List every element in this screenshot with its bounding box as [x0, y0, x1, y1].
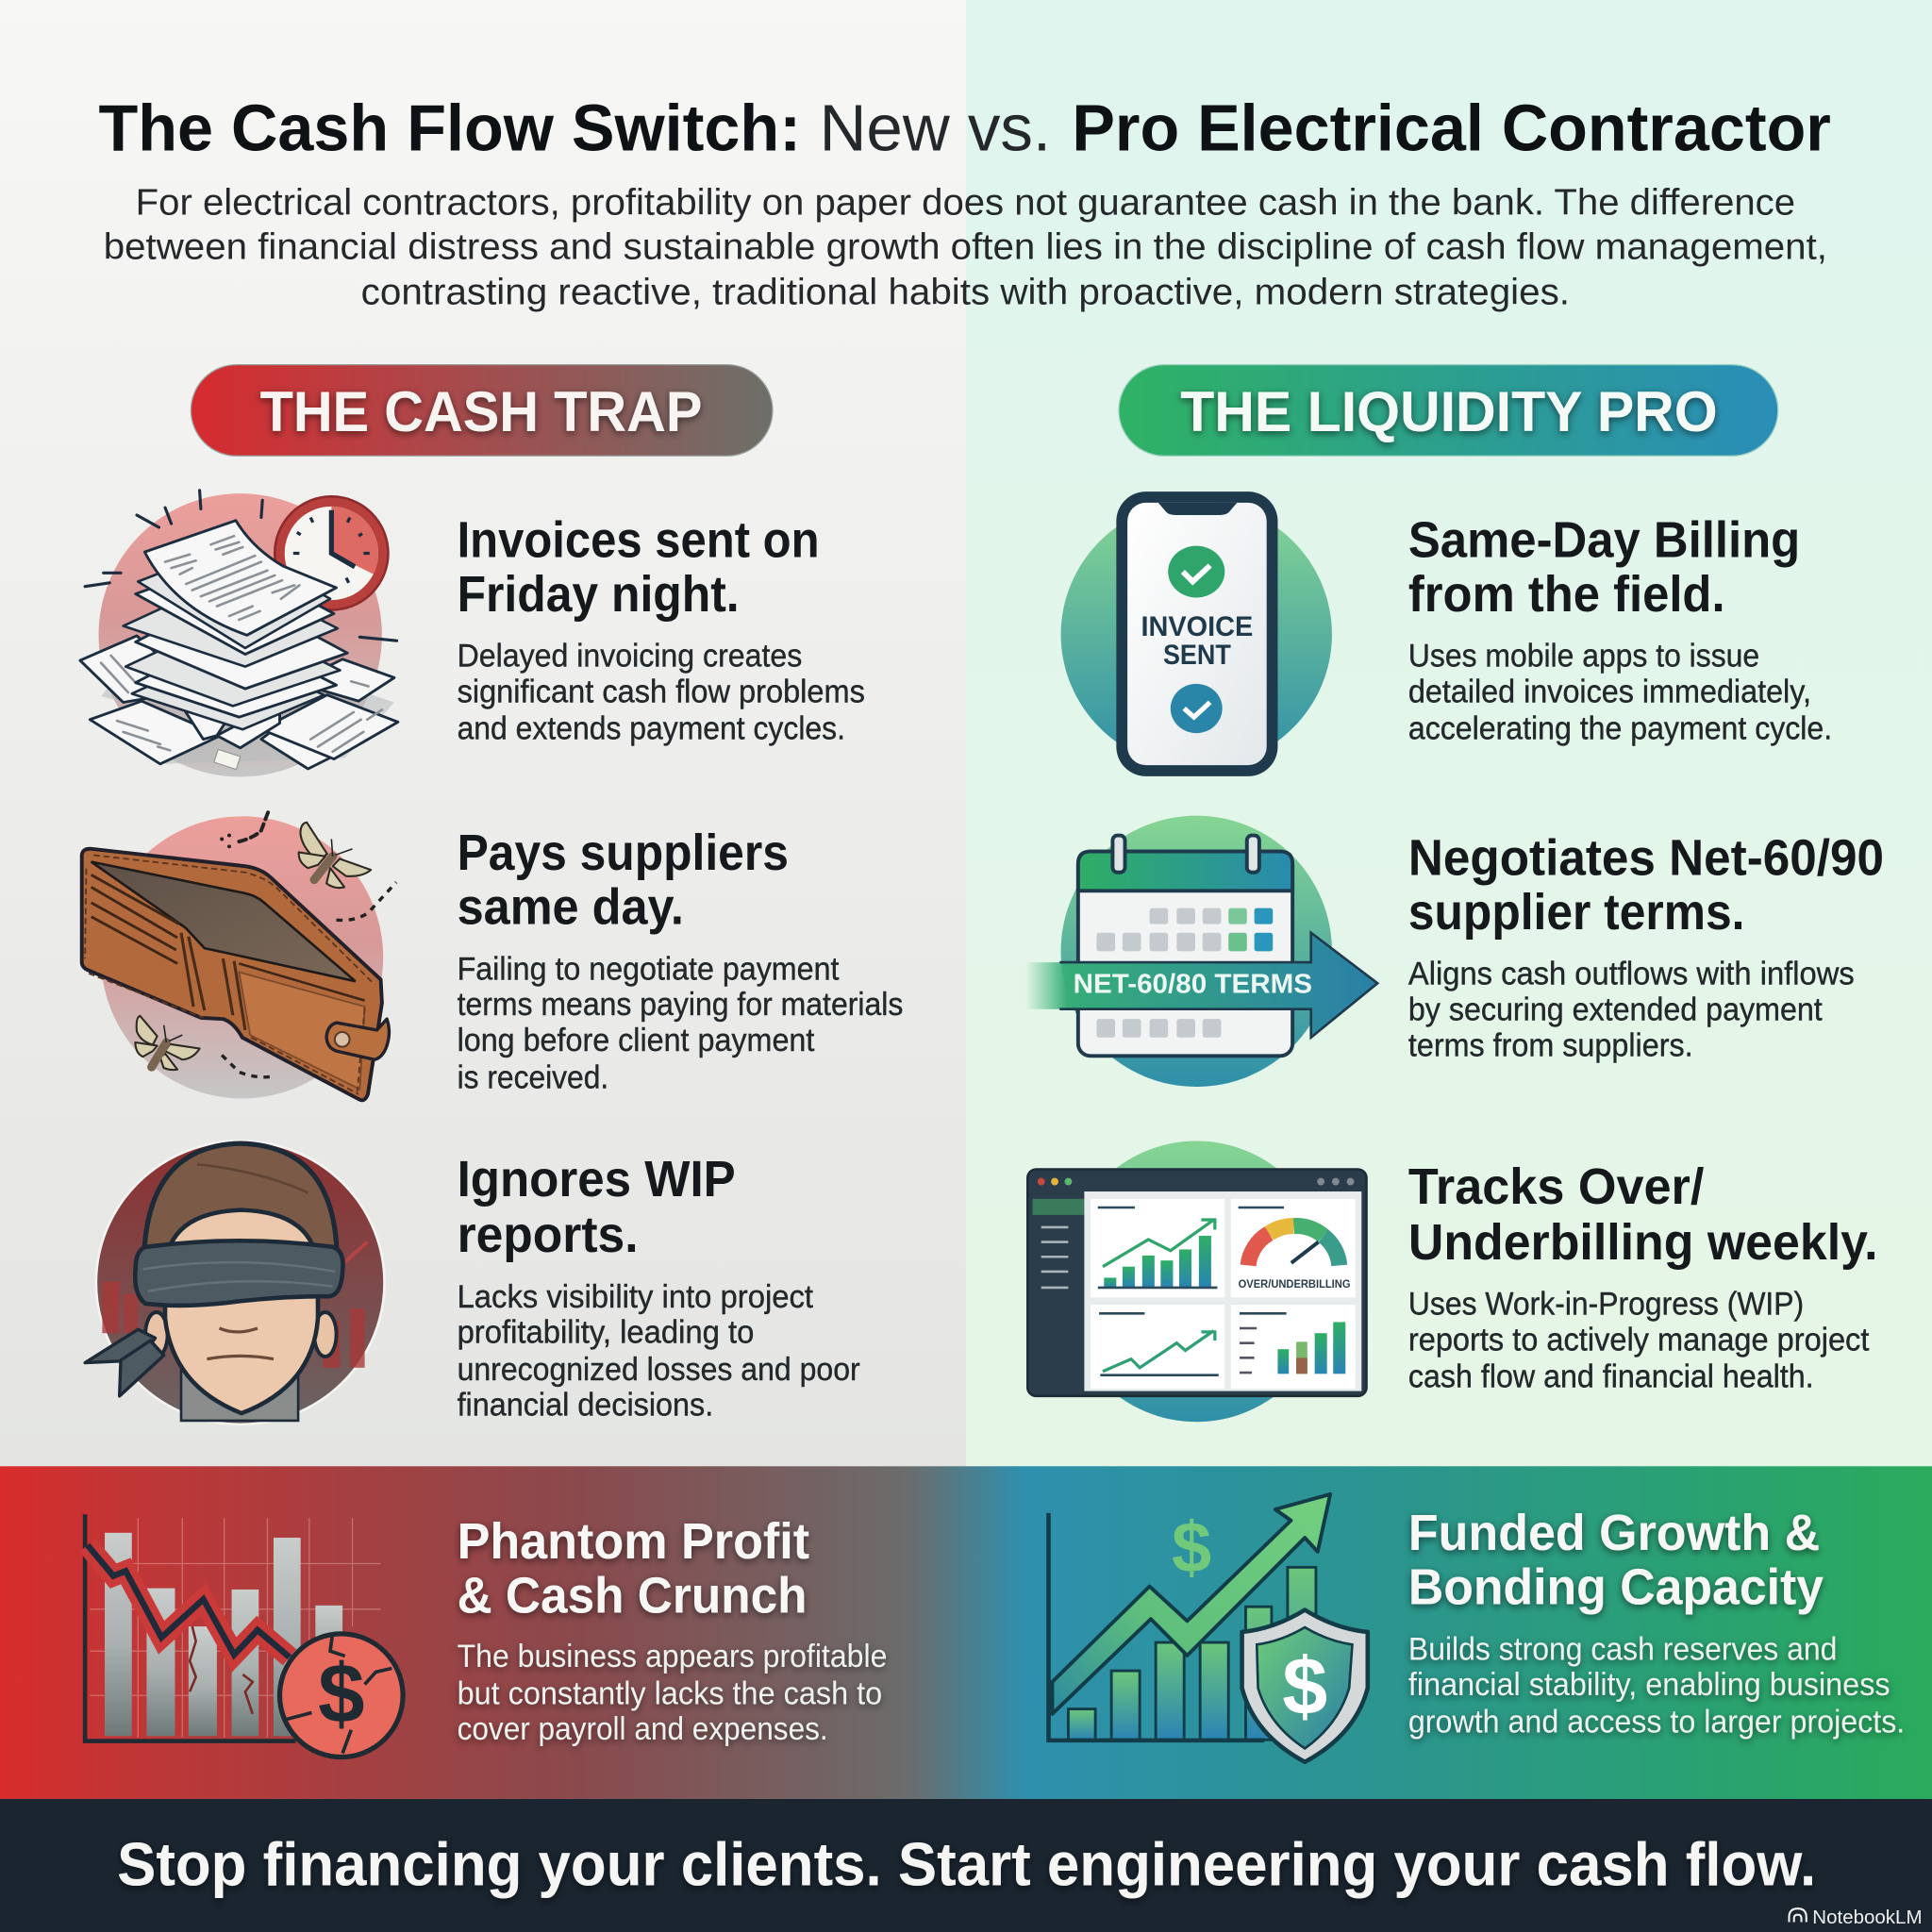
text: pays suppliers same day: Pays suppliers: [458, 825, 789, 881]
text: same-day billing: [1408, 512, 1832, 747]
icon: paper stack with clock: [80, 491, 398, 777]
text: tracks over underbilling: [1408, 1159, 1878, 1395]
text: invoices sent on friday night: Invoices sent on: [458, 512, 820, 568]
text: funded growth: Builds strong cash reserves and: [1408, 1631, 1837, 1667]
text: same-day billing: Uses mobile apps to issue: [1408, 639, 1759, 675]
text: negotiates supplier terms: by securing extended payment: [1408, 991, 1823, 1027]
icon: blindfolded man: [85, 1141, 385, 1424]
chart: bars and trend: [1098, 1220, 1217, 1288]
text: ignores wip reports: Ignores WIP: [458, 1152, 736, 1208]
chart: gauge: OVER/UNDERBILLING: [1239, 1278, 1351, 1291]
text: negotiates supplier terms: Aligns cash outflows with inflows: [1408, 957, 1855, 992]
text: same-day billing: accelerating the payment cycle.: [1408, 711, 1832, 747]
text: phantom profit: cover payroll and expenses.: [458, 1711, 828, 1747]
icon: cracked dollar coin: $: [318, 1647, 364, 1740]
title: [98, 91, 1831, 164]
panel: outcome band: [0, 1466, 1932, 1799]
text: same-day billing: detailed invoices immediately,: [1408, 674, 1811, 709]
text: tracks over underbilling: cash flow and financial health.: [1408, 1359, 1814, 1395]
icon part: moth: [299, 823, 371, 888]
text: same-day billing: from the field.: [1408, 567, 1725, 623]
chart: stacked bars: [1240, 1322, 1345, 1374]
text: pays suppliers same day: same day.: [458, 880, 684, 936]
chart: line: [1103, 1331, 1215, 1372]
text: negotiates supplier terms: terms from suppliers.: [1408, 1027, 1693, 1063]
heading: the cash trap pill: THE CASH TRAP: [260, 380, 702, 443]
intro text: [104, 182, 1827, 313]
text: negotiates supplier terms: supplier terms.: [1408, 885, 1744, 941]
text: pays suppliers same day: long before client payment: [458, 1023, 815, 1058]
icon part: blue check: [1171, 684, 1223, 733]
text: phantom profit: Phantom Profit: [458, 1514, 809, 1570]
chart: rising growth with shield: [1049, 1494, 1368, 1762]
panel: footer bar: [0, 1799, 1932, 1932]
heading: the cash trap pill: [191, 365, 773, 456]
text: negotiates supplier terms: [1408, 830, 1884, 1063]
text: tracks over underbilling: Underbilling weekly.: [1408, 1215, 1878, 1271]
icon: calendar with net terms arrow: [1025, 816, 1377, 1087]
title: The Cash Flow Switch:: [98, 91, 801, 164]
text: funded growth: Funded Growth &: [1408, 1506, 1820, 1561]
icon: phone invoice sent: INVOICE: [1141, 611, 1253, 642]
text: invoices sent on friday night: significant cash flow problems: [458, 674, 865, 709]
icon: shield with dollar: $: [1282, 1641, 1327, 1732]
text: pays suppliers same day: terms means paying for materials: [458, 987, 903, 1023]
text: invoices sent on friday night: Delayed invoicing creates: [458, 639, 802, 675]
title: New vs.: [820, 91, 1051, 164]
text: pays suppliers same day: [458, 825, 903, 1095]
icon: calendar with net terms arrow: NET-60/80 TERMS: [1074, 970, 1312, 1000]
text: tracks over underbilling: Tracks Over/: [1408, 1159, 1704, 1215]
text: ignores wip reports: [458, 1152, 860, 1424]
text: phantom profit: but constantly lacks the cash to: [458, 1675, 882, 1711]
icon: cracked dollar coin: [279, 1633, 403, 1757]
icon: phone invoice sent: [1061, 491, 1332, 776]
icon: phone invoice sent: SENT: [1163, 640, 1231, 671]
text: funded growth: Bonding Capacity: [1408, 1560, 1824, 1616]
text: phantom profit: & Cash Crunch: [458, 1569, 808, 1624]
text: invoices sent on friday night: [458, 512, 865, 747]
wallet body: [82, 849, 382, 1100]
title: Pro Electrical Contractor: [1072, 91, 1831, 164]
text: pays suppliers same day: Failing to negotiate payment: [458, 951, 840, 987]
text: footer call to action: Stop financing your clients. Start engineering your cash flow.: [117, 1829, 1816, 1898]
text: ignores wip reports: Lacks visibility into project: [458, 1279, 813, 1315]
text: ignores wip reports: unrecognized losses and poor: [458, 1352, 860, 1388]
text: invoices sent on friday night: and extends payment cycles.: [458, 711, 845, 747]
text: funded growth: financial stability, enabling business: [1408, 1667, 1890, 1703]
text: phantom profit: The business appears profitable: [458, 1639, 887, 1674]
panel: right background: [966, 0, 1932, 1466]
chart: falling profit with cracked coin: [85, 1514, 403, 1757]
icon part: green check: [1168, 546, 1224, 597]
text: ignores wip reports: profitability, leading to: [458, 1315, 754, 1351]
text: tracks over underbilling: Uses Work-in-Progress (WIP): [1408, 1287, 1804, 1323]
icon part: clock: [275, 496, 388, 610]
intro text: contrasting reactive, traditional habits with proactive, modern strategies.: [361, 273, 1570, 313]
panel: left background: [0, 0, 966, 1466]
icon: financial dashboard: [1027, 1141, 1366, 1422]
heading: the liquidity pro pill: [1119, 365, 1778, 456]
text: funded growth: [1408, 1506, 1905, 1740]
text: tracks over underbilling: reports to actively manage project: [1408, 1323, 1870, 1358]
chart: rising growth with shield: $: [1172, 1508, 1211, 1589]
text: funded growth: growth and access to larger projects.: [1408, 1704, 1905, 1740]
heading: the liquidity pro pill: THE LIQUIDITY PRO: [1180, 380, 1718, 443]
text: negotiates supplier terms: Negotiates Net-60/90: [1408, 830, 1884, 886]
icon part: second moth: [135, 1016, 200, 1070]
text: same-day billing: Same-Day Billing: [1408, 512, 1800, 568]
text: ignores wip reports: reports.: [458, 1208, 639, 1263]
intro text: For electrical contractors, profitability on paper does not guarantee cash in the bank. The difference: [136, 182, 1795, 223]
icon: shield with dollar: [1242, 1610, 1368, 1762]
text: notebooklm mark: NotebookLM: [1812, 1907, 1923, 1928]
text: pays suppliers same day: is received.: [458, 1059, 608, 1095]
wallet strap: [326, 1019, 389, 1059]
text: invoices sent on friday night: Friday night.: [458, 567, 740, 623]
blindfold tie: [85, 1329, 164, 1396]
text: phantom profit: [458, 1514, 887, 1747]
intro text: between financial distress and sustainable growth often lies in the discipline of cash flow management,: [104, 226, 1827, 267]
chart: gauge: [1239, 1226, 1351, 1291]
text: ignores wip reports: financial decisions.: [458, 1388, 713, 1424]
icon: empty wallet with moths: [82, 810, 396, 1100]
